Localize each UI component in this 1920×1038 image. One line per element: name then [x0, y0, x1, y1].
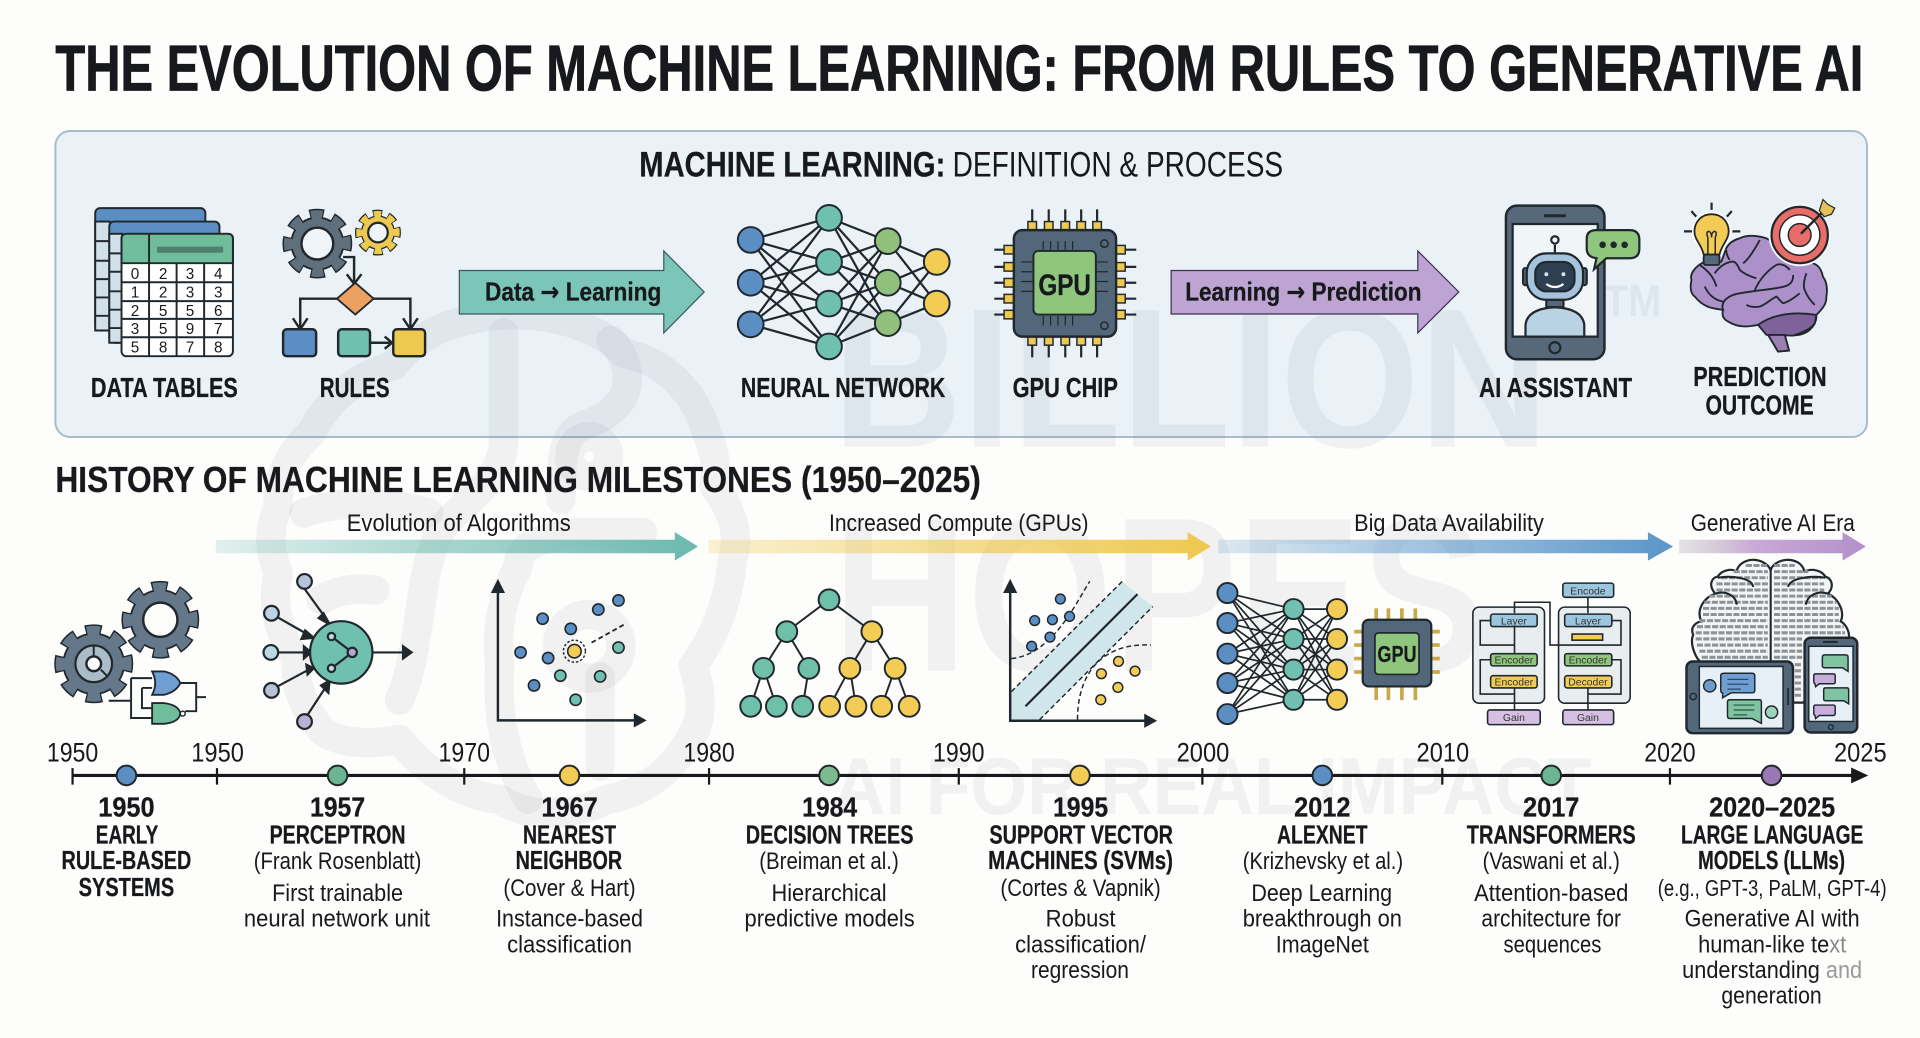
milestone: 1984 decision trees: predictive models	[745, 906, 915, 933]
icon: transformer architecture: Gain	[1577, 713, 1599, 724]
icon: large language model brain and devices	[1686, 560, 1857, 733]
icon: data tables: 8	[159, 340, 167, 357]
icon: data tables: 2	[131, 303, 139, 320]
watermark: Billion Hopes logo and wordmark	[271, 268, 1661, 832]
timeline axis: 2020	[1644, 737, 1696, 767]
icon: transformer architecture: Decoder	[1568, 677, 1608, 688]
icon: data tables: 1	[131, 284, 139, 301]
icon: data tables: 7	[186, 340, 194, 357]
icon: transformer architecture: Encoder	[1495, 655, 1534, 666]
icon: data tables: 2	[159, 284, 167, 301]
icon: data tables: 3	[214, 284, 222, 301]
icon: transformer architecture: Encoder	[1569, 655, 1608, 666]
timeline axis: 2025	[1834, 737, 1887, 767]
icon: GPU chip	[994, 209, 1136, 357]
milestone: 1995 support vector machines	[988, 791, 1173, 984]
timeline axis: 2010	[1417, 737, 1469, 767]
icon: GPU chip: GPU	[1038, 269, 1091, 302]
milestone: 1984 decision trees: Hierarchical	[771, 880, 887, 907]
icon: data tables: 5	[186, 303, 194, 320]
milestone: 1967 nearest neighbor: Instance-based	[496, 906, 643, 933]
milestone: 1957 perceptron: neural network unit	[244, 906, 430, 933]
milestone: 1984 decision trees: 1984	[802, 791, 857, 822]
icon: transformer architecture: Layer	[1575, 616, 1601, 627]
arrow: data to learning	[459, 251, 704, 333]
milestone: 2017 transformers: 2017	[1523, 791, 1579, 822]
timeline axis: 1990	[933, 737, 984, 767]
milestone: 2020-2025 large language models: Generative AI with	[1685, 906, 1860, 933]
milestone: 1967 nearest neighbor: NEIGHBOR	[516, 847, 623, 875]
label: prediction outcome	[1693, 361, 1827, 420]
icon: rules flowchart	[283, 210, 425, 356]
icon: transformer architecture: Gain	[1503, 713, 1525, 724]
arrow: learning to prediction: Learning → Prediction	[1185, 278, 1421, 308]
milestone: 1957 perceptron	[244, 791, 430, 933]
icon: transformer architecture: Layer	[1501, 616, 1527, 627]
milestone: 2017 transformers: Attention-based	[1474, 880, 1628, 907]
milestone: 1995 support vector machines: MACHINES (SVMs)	[988, 847, 1173, 875]
timeline axis	[47, 737, 1887, 785]
panel heading: MACHINE LEARNING:	[639, 144, 945, 184]
milestone: 2012 AlexNet	[1243, 791, 1403, 958]
era arrow: big data availability	[1218, 510, 1673, 561]
icon: data tables: 0	[131, 266, 139, 283]
icon: data tables: 9	[186, 321, 194, 338]
milestone: 2017 transformers	[1467, 791, 1636, 958]
icon: transformer architecture: Encode	[1570, 586, 1606, 597]
milestone: 1967 nearest neighbor: NEAREST	[523, 821, 616, 849]
milestone: 2020-2025 large language models: MODELS (LLMs)	[1698, 847, 1845, 875]
milestone: 2012 AlexNet: breakthrough on	[1243, 906, 1402, 933]
icon: nearest neighbor scatter plot	[492, 580, 645, 726]
milestone: 2017 transformers: sequences	[1503, 931, 1601, 958]
milestone: 1950 early rule-based systems: RULE-BASED	[62, 847, 191, 875]
panel background: definition and process	[55, 131, 1867, 437]
milestone: 1967 nearest neighbor: classification	[507, 931, 632, 958]
icon: data tables: 8	[214, 340, 222, 357]
milestone: 1995 support vector machines: SUPPORT VECTOR	[989, 821, 1173, 849]
icon: support vector machine plot	[1004, 580, 1156, 727]
milestone: 1984 decision trees: DECISION TREES	[746, 821, 913, 849]
milestone: 1967 nearest neighbor	[496, 791, 643, 958]
label: prediction outcome: OUTCOME	[1705, 389, 1814, 420]
label: prediction outcome: PREDICTION	[1693, 361, 1827, 392]
icon: data tables: 5	[131, 340, 139, 357]
milestone: 1995 support vector machines: 1995	[1053, 791, 1108, 822]
icon: data tables: 6	[214, 303, 222, 320]
milestone: 2017 transformers: TRANSFORMERS	[1467, 821, 1636, 849]
milestone: 1957 perceptron: PERCEPTRON	[270, 821, 406, 849]
milestone: 2020-2025 large language models: understanding and	[1682, 957, 1862, 984]
milestone: 2020-2025 large language models: generation	[1721, 983, 1822, 1010]
milestone: 2012 AlexNet: Deep Learning	[1251, 880, 1392, 907]
milestone: 2020-2025 large language models: human-like text	[1698, 931, 1846, 958]
milestone: 2017 transformers: (Vaswani et al.)	[1483, 848, 1620, 875]
label: rules: RULES	[320, 372, 390, 403]
icon: transformer architecture	[1473, 583, 1630, 725]
icon: gears and logic gates	[55, 582, 206, 724]
era arrow: increased compute	[708, 510, 1211, 561]
milestone: 1995 support vector machines: classification/	[1015, 931, 1146, 958]
icon: decision tree	[740, 589, 920, 717]
milestone: 1957 perceptron: (Frank Rosenblatt)	[254, 848, 421, 875]
watermark: Billion Hopes logo and wordmark: BILLION	[833, 268, 1549, 490]
panel heading: DEFINITION & PROCESS	[953, 144, 1283, 184]
timeline axis: 1970	[439, 737, 490, 767]
milestone: 2012 AlexNet: ALEXNET	[1277, 821, 1368, 849]
watermark: Billion Hopes logo and wordmark: AI FOR REAL IMPACT	[833, 742, 1592, 832]
milestone: 1984 decision trees: (Breiman et al.)	[759, 848, 899, 875]
milestone: 1957 perceptron: 1957	[310, 791, 365, 822]
milestone: 1950 early rule-based systems	[62, 791, 191, 902]
timeline axis: 1980	[683, 737, 735, 767]
icon: data tables: 3	[186, 284, 194, 301]
icon: data tables	[95, 208, 233, 357]
milestone: 1995 support vector machines: regression	[1031, 957, 1129, 984]
icon: prediction outcome brain with bulb and target	[1684, 200, 1835, 352]
era arrow: evolution of algorithms: Evolution of Algorithms	[347, 510, 571, 537]
milestone: 2020-2025 large language models: LARGE LANGUAGE	[1681, 821, 1863, 849]
timeline axis: 2000	[1177, 737, 1229, 767]
timeline axis: 1950	[191, 737, 244, 767]
arrow: data to learning: Data → Learning	[485, 278, 661, 308]
icon: data tables: 4	[214, 266, 223, 283]
label: AI assistant: AI ASSISTANT	[1479, 372, 1632, 403]
milestone: 1957 perceptron: First trainable	[272, 880, 403, 907]
milestone: 1995 support vector machines: Robust	[1046, 906, 1116, 933]
milestone: 2012 AlexNet: ImageNet	[1276, 931, 1369, 958]
label: GPU chip: GPU CHIP	[1013, 372, 1118, 403]
icon: data tables: 5	[159, 321, 167, 338]
milestone: 1950 early rule-based systems: EARLY	[96, 821, 158, 849]
era arrow: generative AI era	[1679, 510, 1866, 561]
icon: AlexNet network and GPU: GPU	[1377, 641, 1417, 667]
watermark: Billion Hopes logo and wordmark: TM	[1604, 277, 1661, 326]
era arrow: generative AI era: Generative AI Era	[1691, 510, 1855, 537]
arrow: learning to prediction	[1171, 251, 1459, 333]
icon: data tables: 5	[159, 303, 167, 320]
milestone: 2020-2025 large language models: 2020–2025	[1709, 791, 1835, 822]
watermark: Billion Hopes logo and wordmark: HOPES	[833, 472, 1486, 718]
era arrow: big data availability: Big Data Availability	[1354, 510, 1545, 537]
icon: data tables: 3	[131, 321, 139, 338]
milestone: 1967 nearest neighbor: (Cover & Hart)	[503, 875, 636, 902]
icon: transformer architecture: Encoder	[1495, 677, 1534, 688]
icon: data tables: 2	[159, 266, 167, 283]
milestone: 2020-2025 large language models	[1658, 791, 1887, 1010]
milestone: 2012 AlexNet: (Krizhevsky et al.)	[1243, 848, 1403, 875]
icon: AlexNet network and GPU	[1217, 583, 1440, 724]
era arrow: evolution of algorithms	[216, 510, 698, 561]
section heading: history: HISTORY OF MACHINE LEARNING MILESTONES (1950–2025)	[55, 459, 981, 500]
milestone: 1984 decision trees	[745, 791, 915, 933]
milestone: 1950 early rule-based systems: SYSTEMS	[79, 874, 174, 902]
icon: perceptron	[264, 574, 412, 729]
icon: data tables: 3	[186, 266, 194, 283]
milestone: 1950 early rule-based systems: 1950	[98, 791, 155, 822]
milestone: 2012 AlexNet: 2012	[1294, 791, 1350, 822]
timeline axis: 1950	[47, 737, 98, 767]
label: neural network: NEURAL NETWORK	[741, 372, 945, 403]
panel heading	[639, 144, 1283, 184]
milestone: 1967 nearest neighbor: 1967	[541, 791, 598, 822]
icon: data tables: 7	[214, 321, 222, 338]
icon: neural network	[738, 205, 950, 359]
milestone: 2017 transformers: architecture for	[1481, 906, 1621, 933]
milestone: 1995 support vector machines: (Cortes & Vapnik)	[1000, 875, 1161, 902]
icon: AI assistant on phone	[1506, 206, 1639, 359]
label: data tables: DATA TABLES	[91, 372, 238, 403]
era arrow: increased compute: Increased Compute (GPUs)	[829, 510, 1089, 537]
